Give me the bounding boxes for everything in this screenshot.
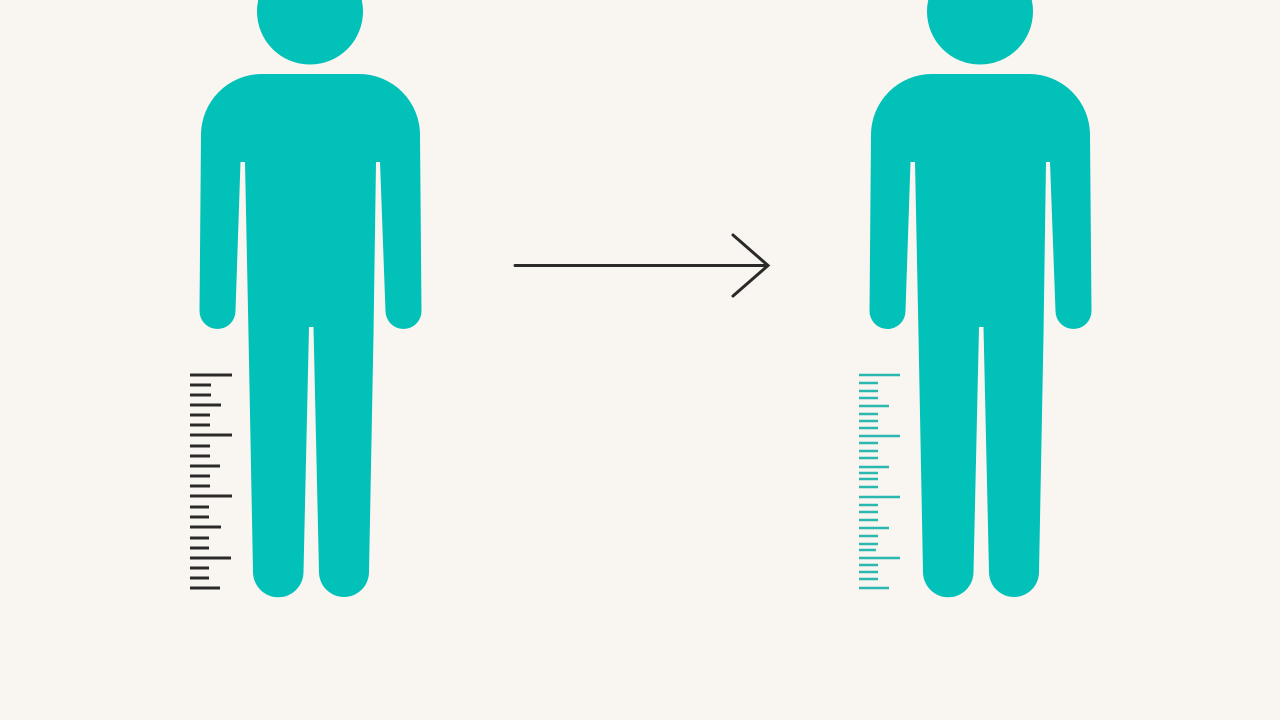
icon: left person figure bbox=[200, 0, 422, 597]
left person head bbox=[257, 0, 363, 64]
left person body bbox=[200, 74, 422, 597]
icon: right person figure bbox=[870, 0, 1092, 597]
right ruler (teal, finer divisions) bbox=[859, 375, 900, 588]
right person body bbox=[870, 74, 1092, 597]
arrow pointing right bbox=[515, 235, 768, 296]
right person head bbox=[927, 0, 1033, 64]
left ruler (dark) bbox=[190, 375, 232, 588]
